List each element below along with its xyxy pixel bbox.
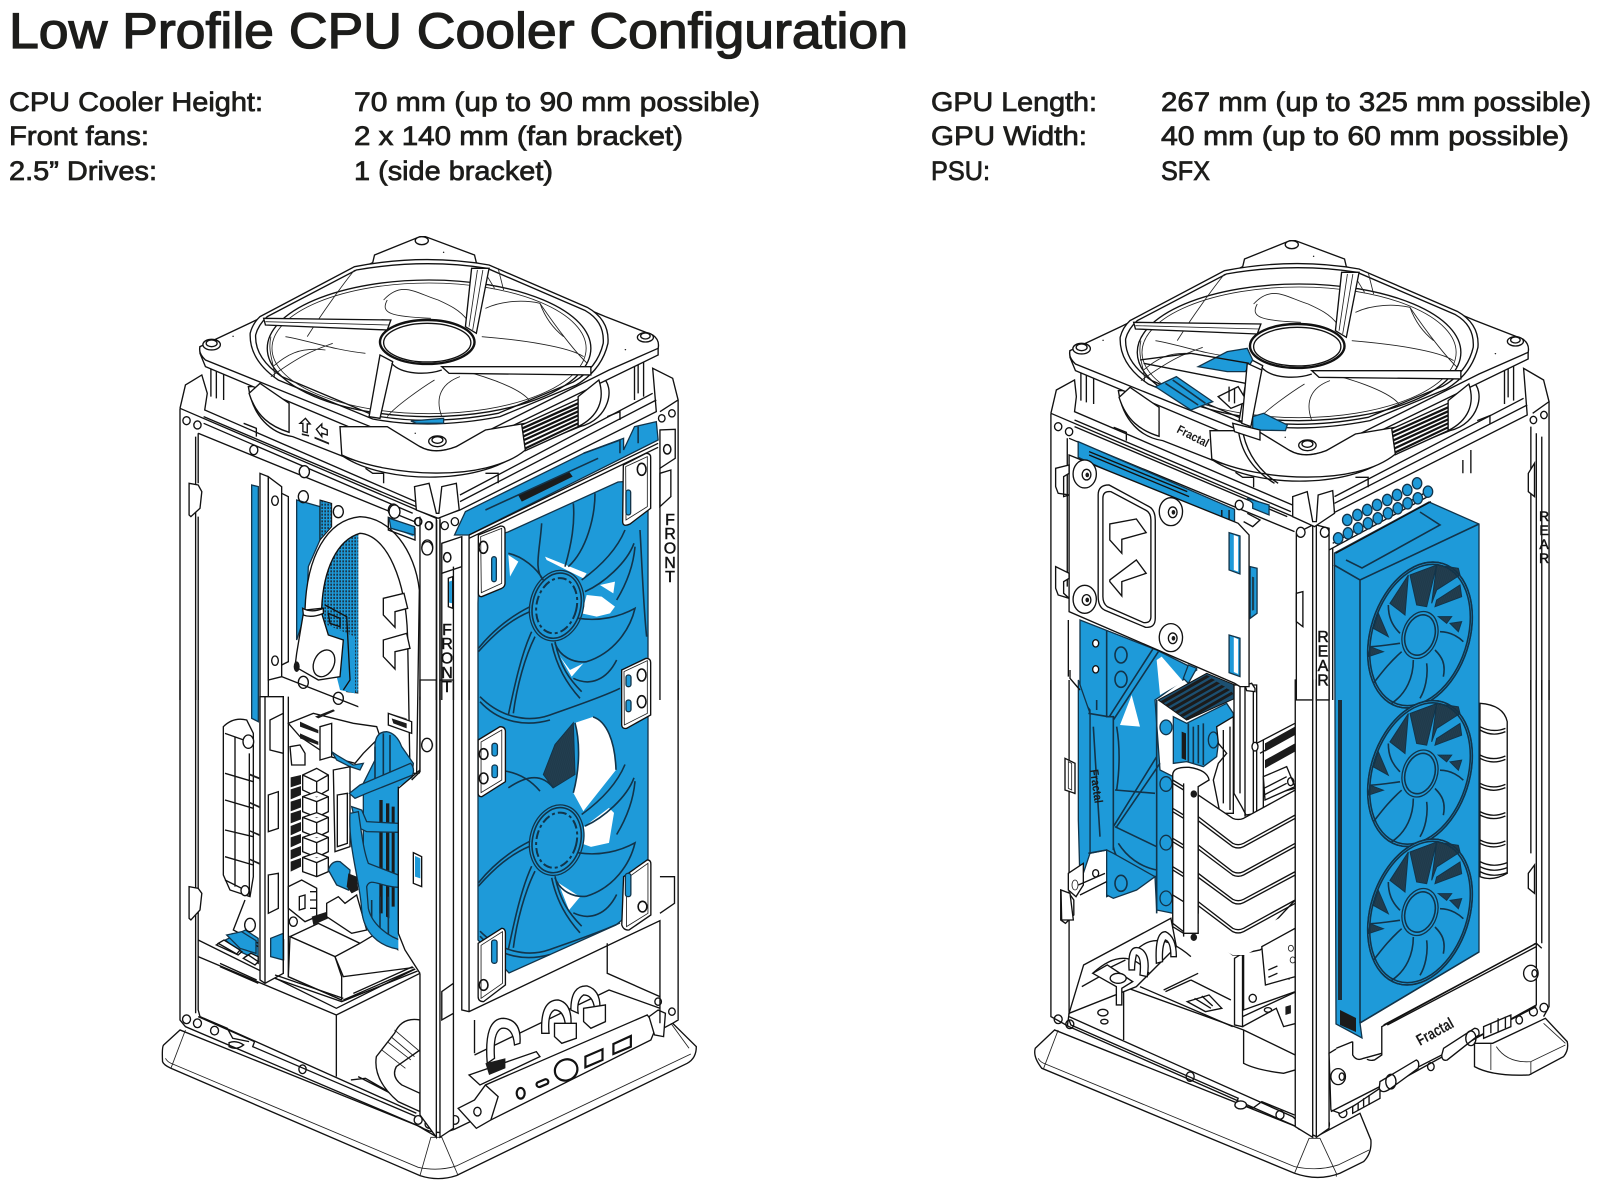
fan hub	[380, 320, 475, 364]
base and lower chassis	[162, 680, 696, 1179]
spec list: GPU and PSU: GPU Width:	[931, 121, 1087, 151]
fan struts	[465, 268, 489, 333]
fan frame	[250, 260, 608, 424]
brand mark on rear plate: Fractal	[1414, 1015, 1457, 1049]
cooler side parts	[1213, 717, 1233, 813]
rear plate	[1329, 943, 1536, 1113]
relays	[303, 768, 328, 877]
label: REAR (right post): R	[1539, 508, 1549, 524]
cooling fan assembly on top	[200, 237, 658, 483]
label: FRONT (right post): T	[665, 569, 675, 586]
blue front fans	[478, 453, 651, 1002]
power cable gland	[376, 1019, 420, 1112]
title: Low Profile CPU Cooler Configuration	[9, 3, 908, 59]
label: REAR (center post): R	[1317, 672, 1329, 690]
brand mark on side fan: Fractal	[1087, 768, 1106, 804]
label: FRONT (right post): R	[664, 526, 676, 543]
left case illustration: front view	[162, 237, 696, 1179]
upper fan	[478, 493, 647, 723]
base, foot and floor	[1035, 918, 1568, 1177]
connector	[288, 880, 317, 922]
spec list: GPU and PSU: GPU Length:	[931, 87, 1097, 117]
fan C	[1350, 825, 1490, 999]
label: FRONT (right post): N	[664, 555, 676, 572]
brand mark on top fan: Fractal	[1175, 422, 1211, 450]
chassis upper frame	[180, 368, 678, 700]
label: FRONT (right post): F	[665, 512, 675, 529]
right case illustration: rear view	[1035, 241, 1568, 1177]
board	[288, 720, 400, 940]
floor plate and PSU	[1069, 987, 1296, 1120]
center post and drive bracket (upper)	[1056, 442, 1335, 700]
front I/O panel	[475, 943, 660, 1055]
label: REAR (center post): R	[1317, 629, 1329, 646]
lower fan	[478, 717, 635, 958]
drive bracket	[1069, 455, 1249, 687]
label: FRONT (center post): F	[442, 622, 452, 639]
blue tube bundle	[363, 732, 413, 948]
PCIe slot cover vents	[1329, 478, 1433, 553]
inner floor blue parts	[225, 930, 258, 960]
card body	[1334, 502, 1479, 1038]
fan window blue field	[478, 480, 648, 973]
blue seen through top fan	[1140, 348, 1287, 483]
label: REAR (right post): A	[1539, 536, 1549, 552]
spec list: GPU and PSU: SFX	[1161, 156, 1210, 186]
label: REAR (right post): R	[1539, 550, 1549, 566]
fan bracket side rail	[468, 680, 470, 1012]
mounting plate	[200, 347, 658, 459]
small blue detail under left hub and arrow icons	[300, 418, 444, 445]
spec list: cooler and fans: Front fans:	[9, 121, 149, 151]
rear chassis frame	[1051, 368, 1549, 700]
white openings	[573, 717, 616, 811]
side bracket	[398, 697, 433, 973]
graphics card	[1329, 478, 1490, 1038]
fan A	[1350, 548, 1490, 722]
center post and rear bracket panel	[1295, 680, 1538, 1137]
spec list: GPU and PSU: 40 mm (up to 60 mm possible)	[1161, 121, 1569, 151]
spec list: cooler and fans: 2 x 140 mm (fan bracket)	[354, 121, 683, 151]
label: FRONT (center post): T	[442, 679, 452, 696]
bracket	[327, 895, 367, 933]
left post and rails	[180, 680, 436, 1137]
power supply box	[198, 940, 420, 1117]
spec list: cooler and fans: 2.5” Drives:	[9, 156, 157, 186]
panel internals: motherboard area with white tube	[252, 473, 440, 780]
spec list: cooler and fans: 1 (side bracket)	[354, 156, 553, 186]
tube connector	[325, 605, 350, 690]
spec list: GPU and PSU	[931, 87, 1591, 186]
fan brackets	[478, 453, 651, 728]
heatsink fins seen through fan	[543, 723, 575, 788]
fan bracket top and upper blue fan edge	[299, 422, 675, 700]
label: FRONT (center post): R	[441, 636, 453, 653]
spec list: cooler and fans	[9, 87, 760, 186]
spec list: GPU and PSU: 267 mm (up to 325 mm possible)	[1161, 87, 1591, 117]
blue strip above bracket	[1078, 442, 1235, 528]
label: REAR (right post): E	[1539, 522, 1549, 538]
blue side fan and cooler	[1061, 620, 1295, 920]
center post	[420, 680, 436, 1137]
spec list: cooler and fans: 70 mm (up to 90 mm possible)	[354, 87, 760, 117]
icon: chevrons	[383, 593, 408, 627]
spec list: cooler and fans: CPU Cooler Height:	[9, 87, 263, 117]
transformer block	[290, 923, 360, 957]
label: REAR (center post): A	[1318, 658, 1329, 675]
icon: chevrons	[1110, 519, 1146, 553]
panel internals: relays, tubes, capacitor	[218, 697, 433, 1002]
fan B	[1350, 687, 1490, 860]
spec list: GPU and PSU: PSU:	[931, 156, 990, 186]
riser cable	[1173, 767, 1295, 955]
label: FRONT (center post): O	[441, 650, 453, 668]
label: FRONT (right post): O	[664, 540, 676, 558]
fan side skirts	[249, 383, 289, 432]
label: FRONT (center post): N	[441, 665, 453, 682]
label: REAR (center post): E	[1318, 644, 1328, 660]
top fan assembly (shared drawing)	[1070, 241, 1528, 487]
riser, capacitor and lower rails	[1051, 680, 1549, 1137]
